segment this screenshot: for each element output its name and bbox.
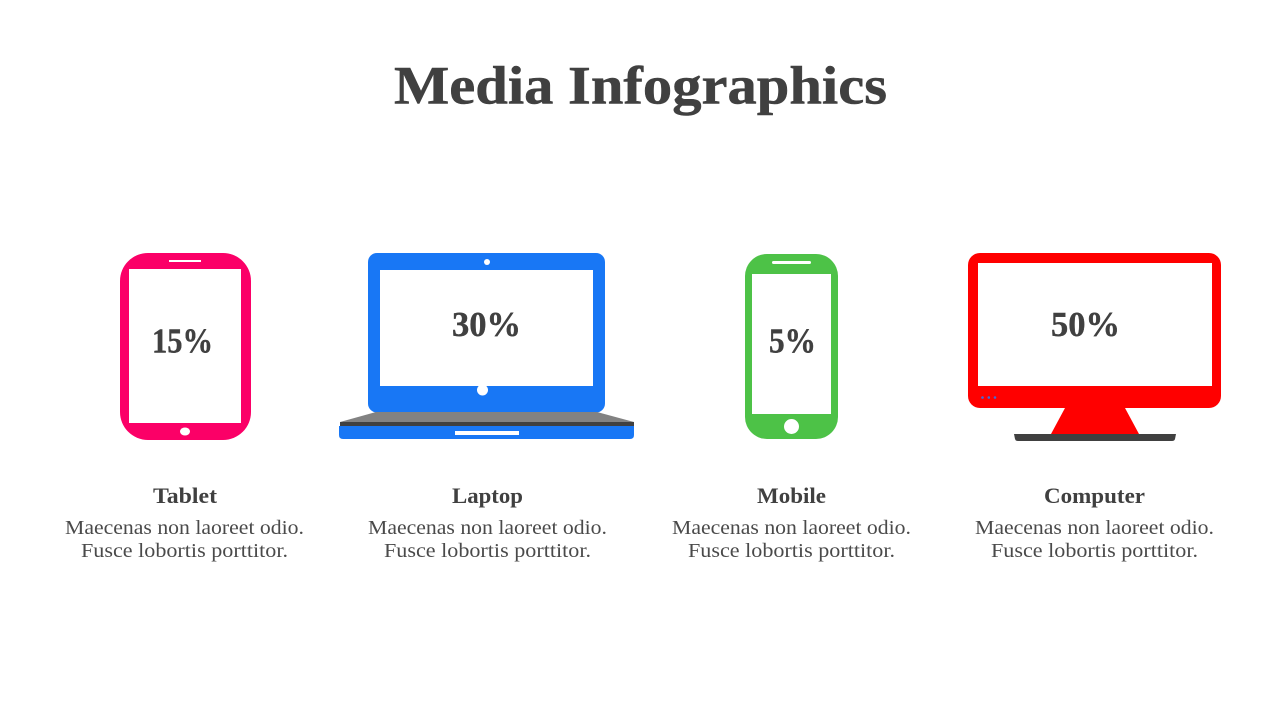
text block: computer: Computer <box>1044 483 1145 508</box>
text block: computer: Maecenas non laoreet odio. <box>975 517 1214 539</box>
text block: laptop: Laptop <box>452 483 523 508</box>
text block: tablet <box>65 483 304 562</box>
text block: laptop: Fusce lobortis porttitor. <box>384 540 591 562</box>
title: Media Infographics <box>394 56 887 116</box>
text block: computer <box>975 483 1214 562</box>
tablet percentage: 15% <box>152 322 213 360</box>
laptop percentage: 30% <box>452 305 521 344</box>
text block: tablet: Fusce lobortis porttitor. <box>81 540 288 562</box>
icon: laptop <box>339 253 634 439</box>
icon: computer <box>968 253 1221 441</box>
text block: mobile: Mobile <box>757 483 826 508</box>
text block: tablet: Maecenas non laoreet odio. <box>65 517 304 539</box>
mobile percentage: 5% <box>769 322 816 360</box>
icon: mobile <box>745 254 838 439</box>
text block: mobile: Maecenas non laoreet odio. <box>672 517 911 539</box>
text block: tablet: Tablet <box>153 483 218 508</box>
text block: mobile: Fusce lobortis porttitor. <box>688 540 895 562</box>
text block: laptop: Maecenas non laoreet odio. <box>368 517 607 539</box>
icon: tablet <box>120 253 251 440</box>
text block: computer: Fusce lobortis porttitor. <box>991 540 1198 562</box>
text block: mobile <box>672 483 911 562</box>
text block: laptop <box>368 483 607 562</box>
computer percentage: 50% <box>1051 305 1120 344</box>
